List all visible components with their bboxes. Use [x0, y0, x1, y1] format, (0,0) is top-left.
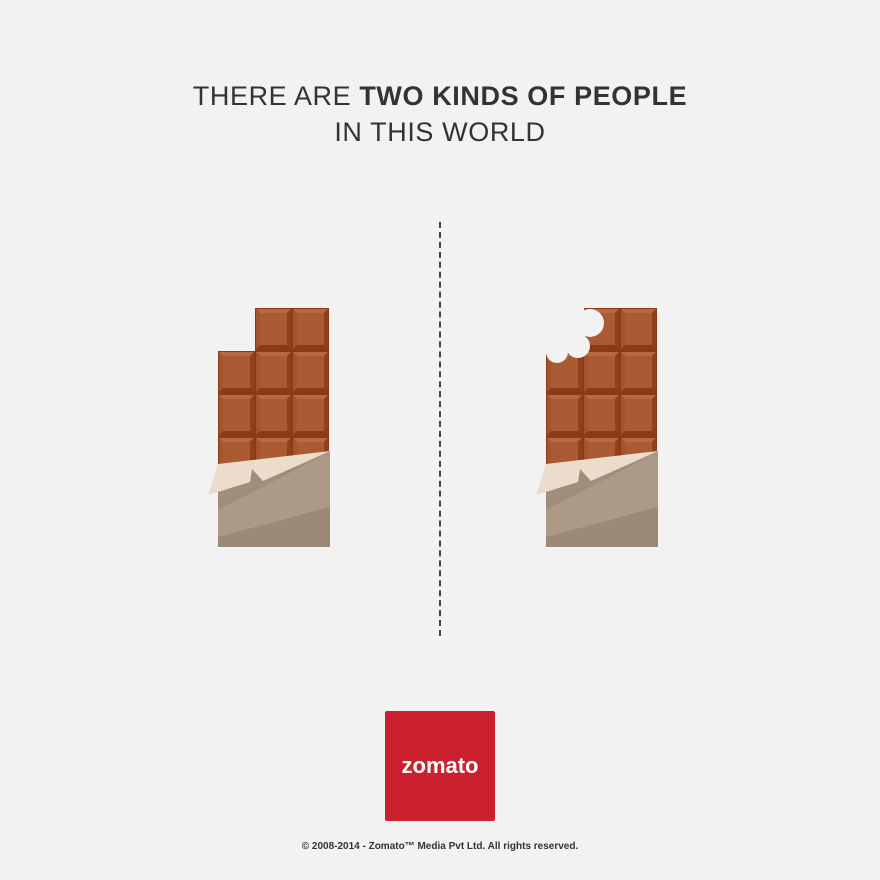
footer copyright: © 2008-2014 - Zomato™ Media Pvt Ltd. All rights reserved. — [302, 841, 578, 852]
logo: zomato — [385, 711, 495, 821]
logo: zomato: zomato — [402, 753, 478, 778]
chocolate bar: bitten (right) — [536, 306, 658, 547]
chocolate bar: whole (left) — [208, 308, 330, 547]
title: IN THIS WORLD — [334, 117, 546, 147]
title — [193, 81, 687, 147]
divider: dashed line — [439, 222, 441, 636]
title: THERE ARE TWO KINDS OF PEOPLE — [193, 81, 687, 111]
